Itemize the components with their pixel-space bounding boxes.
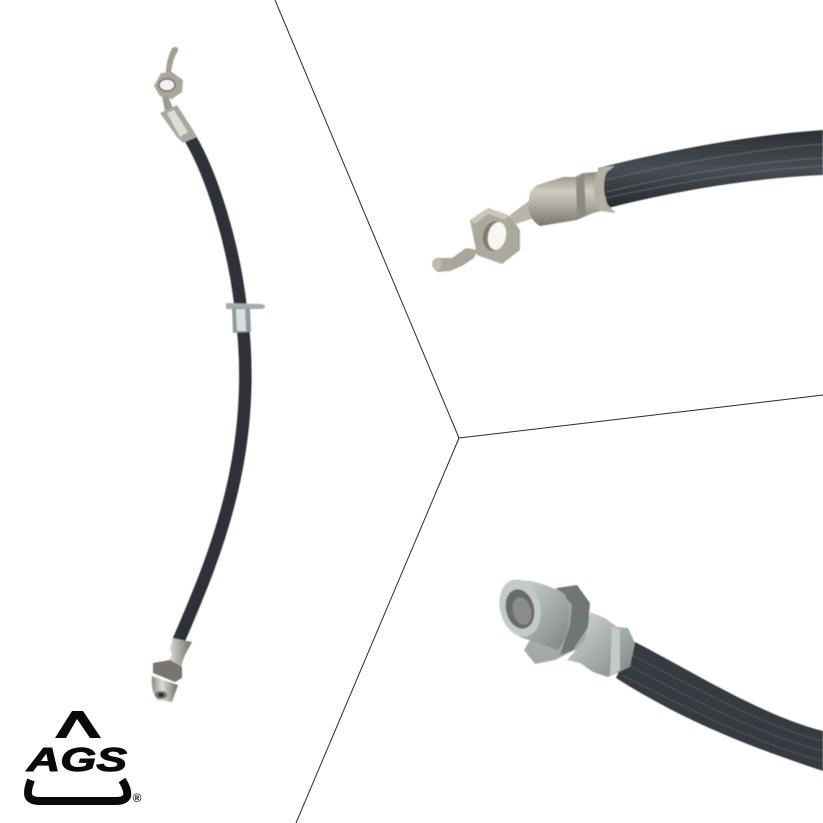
divider lines [275,0,823,823]
close-up hose lower [616,641,823,771]
detail: bottom fitting close-up [494,575,823,771]
hose body [178,138,245,642]
detail: top fitting close-up [432,130,823,272]
full hose view [152,47,265,702]
close-up collar [557,585,590,655]
AGS logo [26,711,142,805]
logo wordmark: AGS [26,741,127,778]
close-up flange [594,166,616,213]
top banjo nut fitting [154,47,197,143]
logo top chevron [55,711,101,738]
registered mark: ® [133,791,142,805]
close-up nut [470,208,520,264]
close-up hose [598,130,823,208]
close-up flange base [524,586,590,664]
close-up tube [510,200,534,231]
close-up tip [433,248,478,272]
logo bottom bracket [28,780,127,801]
close-up tip end [432,258,442,270]
hose bracket clip [226,303,265,333]
bottom threaded fitting [152,638,192,702]
close-up port body [505,580,569,650]
close-up crimp sleeve [528,172,605,226]
close-up ferrule [567,612,635,677]
